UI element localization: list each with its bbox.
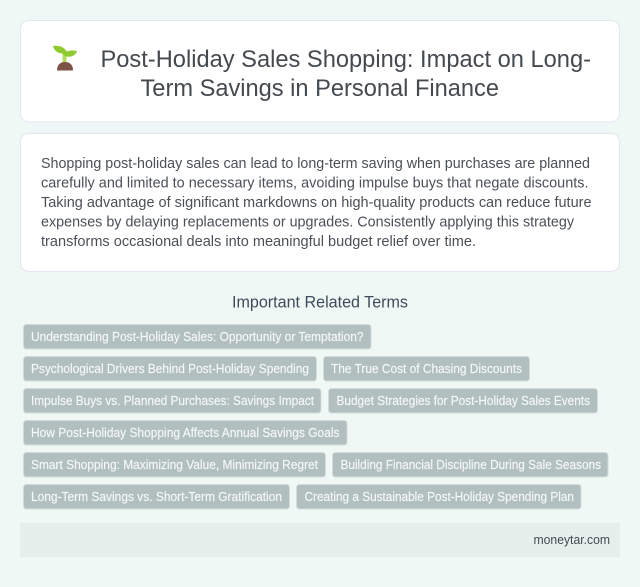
- tag: [24, 356, 316, 381]
- tag: [332, 452, 608, 477]
- footer: moneytar.com: [534, 533, 610, 547]
- text block: summary paragraph: Shopping post-holiday sales can lead to long-term saving when purchases are planned: [41, 156, 590, 172]
- tag: Building Financial Discipline During Sale Seasons: [340, 457, 601, 472]
- tag: [24, 388, 321, 413]
- tag: Long-Term Savings vs. Short-Term Gratification: [31, 489, 282, 504]
- text block: summary paragraph: carefully and limited to necessary items, avoiding impulse buys that negate discounts.: [41, 176, 588, 192]
- panel: title card: [20, 20, 620, 122]
- tag: Budget Strategies for Post-Holiday Sales Events: [336, 393, 590, 408]
- title: [100, 46, 591, 102]
- text block: summary paragraph: transforms occasional deals into meaningful budget relief over time.: [41, 234, 476, 250]
- tag: The True Cost of Chasing Discounts: [331, 361, 522, 376]
- text block: summary paragraph: Taking advantage of significant markdowns on high-quality products can reduce future: [41, 195, 592, 211]
- tag: [24, 324, 371, 349]
- heading: related terms: Important Related Terms: [232, 294, 408, 312]
- tag: [24, 420, 347, 445]
- panel: summary card: [20, 134, 620, 272]
- tag: [24, 484, 290, 509]
- tag: [324, 356, 530, 381]
- tag: [296, 484, 581, 509]
- icon: sprout: [53, 46, 77, 70]
- title: Post-Holiday Sales Shopping: Impact on Long-: [100, 46, 591, 73]
- tag: How Post-Holiday Shopping Affects Annual Savings Goals: [31, 425, 340, 440]
- tag: Understanding Post-Holiday Sales: Opportunity or Temptation?: [31, 329, 364, 344]
- tag: [24, 452, 326, 477]
- tag: Psychological Drivers Behind Post-Holiday Spending: [31, 361, 309, 376]
- tag: [328, 388, 598, 413]
- title: Term Savings in Personal Finance: [140, 75, 499, 102]
- text block: summary paragraph: expenses by delaying replacements or upgrades. Consistently applying this strategy: [41, 214, 575, 230]
- text block: summary paragraph: [41, 156, 592, 250]
- footer: [20, 523, 620, 557]
- tag: Creating a Sustainable Post-Holiday Spending Plan: [304, 489, 574, 504]
- tag: Impulse Buys vs. Planned Purchases: Savings Impact: [31, 393, 314, 408]
- tag: Smart Shopping: Maximizing Value, Minimizing Regret: [31, 457, 318, 472]
- panel: related terms tags: [24, 324, 608, 509]
